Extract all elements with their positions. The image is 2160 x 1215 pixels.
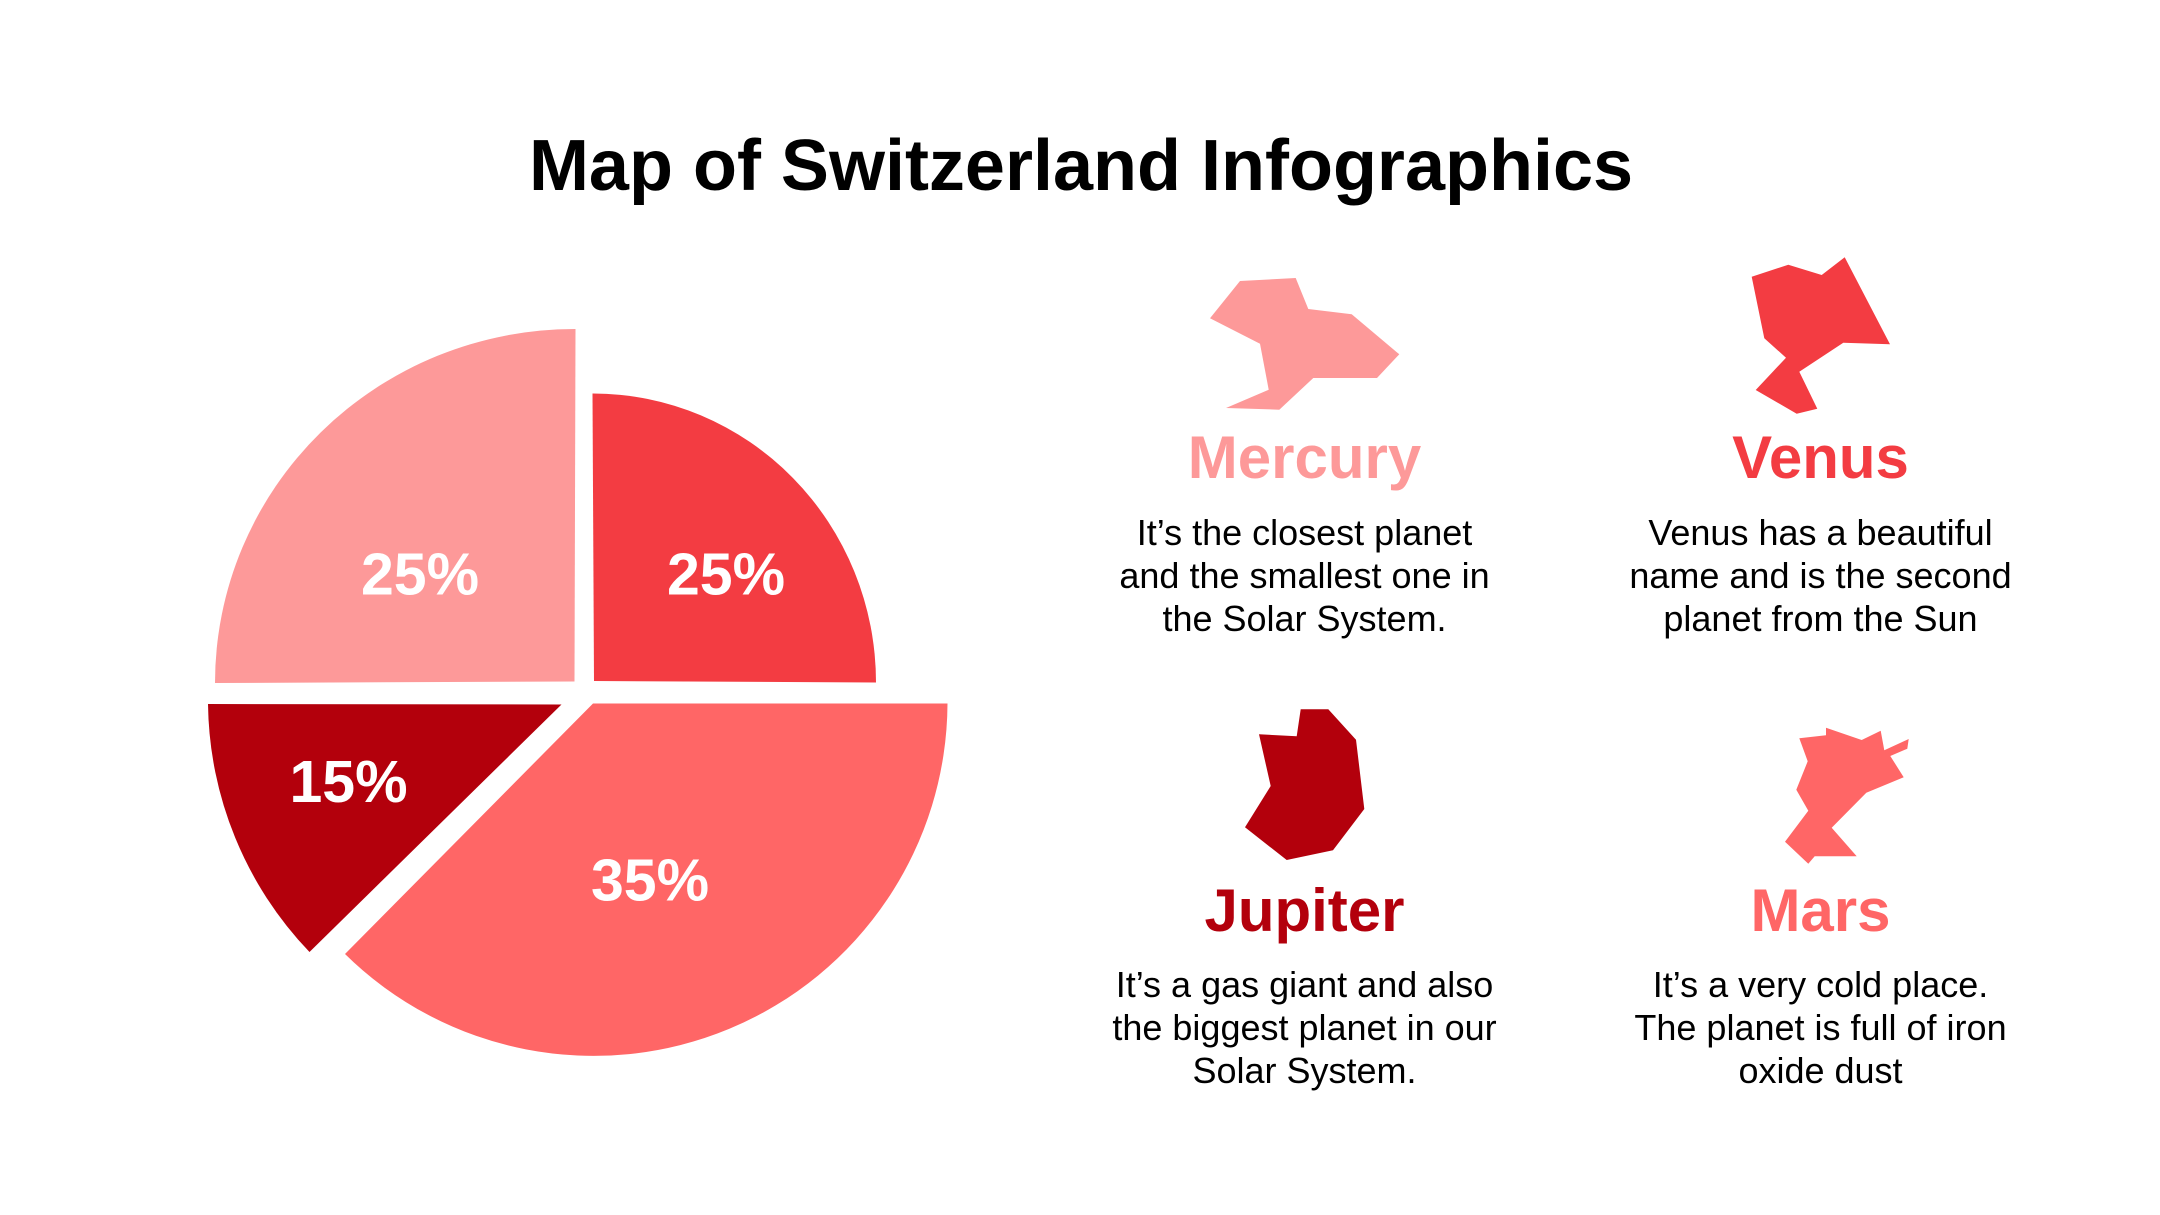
pie slice: 15% dark red [208, 704, 562, 952]
text: Venus description: name and is the second [1629, 555, 2012, 596]
heading: Mars: Mars [1750, 877, 1891, 944]
icon: Venus map shape [1752, 257, 1890, 414]
heading: Venus: Venus [1732, 424, 1909, 491]
text: Mercury description: and the smallest one in [1119, 555, 1490, 596]
pie slice: 15% dark red: 15% [289, 749, 408, 815]
text: Jupiter description: Solar System. [1192, 1050, 1417, 1091]
icon: Mercury map shape [1210, 278, 1399, 410]
panel: Jupiter [1112, 709, 1497, 1091]
heading: Jupiter: Jupiter [1204, 877, 1405, 944]
panel: Venus [1629, 257, 2012, 639]
text: Mercury description: the Solar System. [1162, 598, 1447, 639]
icon: Mars map shape [1785, 728, 1909, 864]
pie slice: 25% light pink [215, 329, 576, 683]
title: Map of Switzerland Infographics [529, 126, 1633, 206]
text: Venus description: planet from the Sun [1663, 598, 1978, 639]
pie chart [208, 329, 948, 1056]
pie slice: 25% red: 25% [667, 542, 785, 608]
icon: Jupiter map shape [1245, 709, 1364, 860]
text: Mars description: It’s a very cold place. [1653, 964, 1988, 1005]
heading: Mercury: Mercury [1188, 424, 1422, 491]
text: Mercury description: It’s the closest planet [1137, 512, 1472, 553]
text: Jupiter description [1112, 964, 1497, 1091]
text: Venus description: Venus has a beautiful [1648, 512, 1993, 553]
pie slice: 35% salmon [345, 704, 948, 1056]
pie slice: 35% salmon: 35% [591, 848, 709, 914]
panel: Mercury [1119, 278, 1490, 639]
panel: Mars [1634, 728, 2007, 1091]
text: Mars description [1634, 964, 2007, 1091]
text: Jupiter description: It’s a gas giant and also [1116, 964, 1493, 1005]
pie slice: 25% light pink: 25% [361, 542, 479, 608]
text: Mercury description [1119, 512, 1490, 639]
text: Mars description: oxide dust [1738, 1050, 1903, 1091]
pie slice: 25% red [592, 393, 876, 682]
text: Venus description [1629, 512, 2012, 639]
text: Jupiter description: the biggest planet in our [1112, 1007, 1497, 1048]
text: Mars description: The planet is full of iron [1634, 1007, 2007, 1048]
